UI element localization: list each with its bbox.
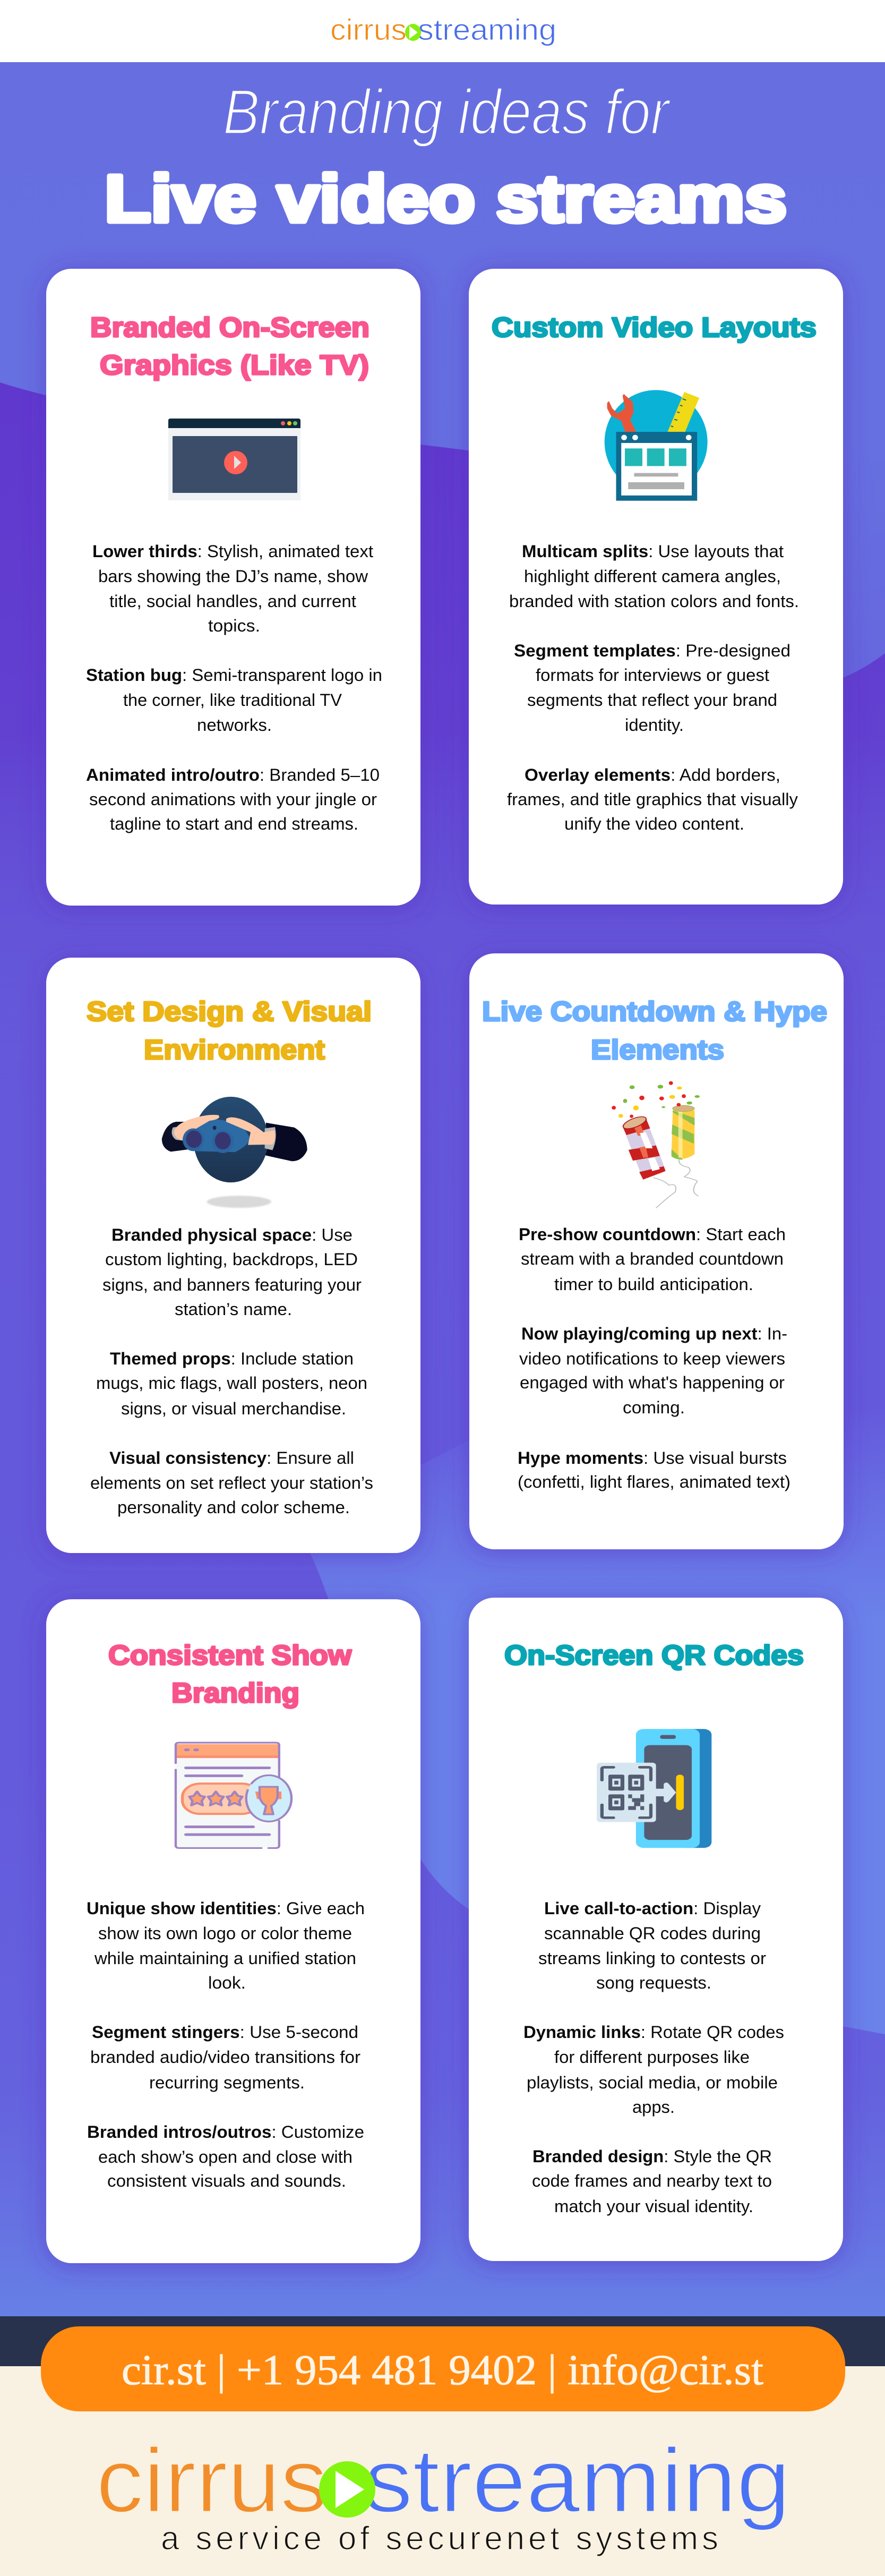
top logo bar: cirrus: [330, 13, 407, 46]
icon: layout window with tools: [605, 390, 708, 501]
text: video layout ideas: branded with station colors and fonts.: [509, 592, 799, 611]
text: countdown and hype ideas: [518, 1225, 791, 1491]
heading: branded on-screen graphics: [90, 312, 370, 381]
text: video layout ideas: highlight different camera angles,: [524, 567, 781, 586]
panel: live countdown and hype elements: [469, 953, 844, 1549]
panel: on-screen qr codes: [469, 1598, 843, 2261]
heading: set design and visual environment: [87, 996, 372, 1065]
text: countdown and hype ideas: Hype moments: Use visual bursts: [518, 1448, 787, 1468]
text: show branding ideas: each show’s open and close with: [98, 2147, 353, 2166]
text: countdown and hype ideas: stream with a branded countdown: [521, 1249, 784, 1268]
text: show branding ideas: Unique show identities: Give each: [87, 1899, 365, 1918]
text: video layout ideas: Overlay elements: Add borders,: [525, 765, 780, 784]
text: on-screen graphics ideas: the corner, like traditional TV: [123, 690, 342, 710]
text: video layout ideas: [507, 542, 799, 833]
text: qr code ideas: [523, 1899, 784, 2216]
text: set design ideas: Visual consistency: Ensure all: [109, 1448, 354, 1468]
text: show branding ideas: while maintaining a unified station: [94, 1949, 356, 1968]
text: video layout ideas: formats for interviews or guest: [536, 666, 769, 685]
heading: consistent show branding: Consistent Show: [108, 1640, 352, 1671]
text: on-screen graphics ideas: Station bug: Semi-transparent logo in: [86, 666, 382, 685]
text: show branding ideas: show its own logo or color theme: [98, 1924, 352, 1943]
text: show branding ideas: consistent visuals and sounds.: [107, 2171, 346, 2190]
text: on-screen graphics ideas: tagline to start and end streams.: [110, 814, 358, 833]
text: show branding ideas: Branded intros/outros: Customize: [87, 2122, 364, 2142]
panel: custom video layouts: [469, 269, 843, 905]
text: set design ideas: signs, or visual merchandise.: [121, 1399, 346, 1418]
text: set design ideas: mugs, mic flags, wall posters, neon: [96, 1374, 367, 1393]
text: video layout ideas: frames, and title graphics that visually: [507, 790, 798, 809]
text: qr code ideas: apps.: [632, 2097, 675, 2117]
text: countdown and hype ideas: Pre-show countdown: Start each: [519, 1225, 786, 1244]
title: [105, 76, 787, 236]
text: set design ideas: station’s name.: [175, 1300, 292, 1319]
title: Branding ideas for: [223, 76, 671, 148]
icon: party poppers: [612, 1081, 700, 1208]
text: on-screen graphics ideas: bars showing the DJ’s name, show: [98, 567, 368, 586]
heading: live countdown and hype elements: [482, 996, 827, 1065]
text: countdown and hype ideas: (confetti, light flares, animated text): [518, 1472, 791, 1491]
contact pill: cir.st | +1 954 481 9402 | info@cir.st: [122, 2347, 763, 2394]
heading: custom video layouts: Custom Video Layouts: [492, 312, 817, 343]
contact pill: [41, 2326, 845, 2411]
text: qr code ideas: for different purposes like: [554, 2048, 750, 2067]
text: qr code ideas: song requests.: [596, 1973, 711, 1992]
text: show branding ideas: look.: [208, 1973, 246, 1992]
text: on-screen graphics ideas: networks.: [197, 715, 272, 735]
text: countdown and hype ideas: Now playing/coming up next: In-: [521, 1324, 787, 1343]
title: Live video streams: [105, 162, 787, 236]
text: qr code ideas: Branded design: Style the QR: [532, 2147, 772, 2166]
text: qr code ideas: streams linking to contests or: [538, 1949, 766, 1968]
text: on-screen graphics ideas: second animations with your jingle or: [89, 790, 377, 809]
text: on-screen graphics ideas: [86, 542, 382, 833]
text: qr code ideas: Live call-to-action: Display: [544, 1899, 761, 1918]
text: show branding ideas: branded audio/video transitions for: [90, 2048, 360, 2067]
heading: on-screen qr codes: On-Screen QR Codes: [504, 1640, 804, 1671]
heading: set design and visual environment: Set Design & Visual: [87, 996, 372, 1027]
text: set design ideas: personality and color scheme.: [117, 1498, 350, 1517]
text: countdown and hype ideas: engaged with what's happening or: [520, 1373, 785, 1392]
text: video layout ideas: segments that reflect your brand: [527, 690, 777, 710]
panel: branded on-screen graphics: [46, 269, 420, 906]
text: on-screen graphics ideas: Animated intro/outro: Branded 5–10: [86, 765, 380, 784]
text: video layout ideas: Multicam splits: Use layouts that: [522, 542, 784, 561]
heading: consistent show branding: [108, 1640, 352, 1709]
icon: figure with binoculars: [162, 1097, 307, 1208]
footer logo: streaming: [364, 2430, 791, 2531]
text: show branding ideas: recurring segments.: [149, 2073, 305, 2092]
text: video layout ideas: unify the video content.: [564, 814, 744, 833]
text: qr code ideas: code frames and nearby text to: [532, 2171, 772, 2190]
text: set design ideas: Branded physical space: Use: [111, 1225, 353, 1244]
text: countdown and hype ideas: timer to build anticipation.: [554, 1275, 753, 1294]
text: qr code ideas: scannable QR codes during: [544, 1924, 761, 1943]
text: show branding ideas: Segment stingers: Use 5-second: [92, 2023, 358, 2042]
heading: live countdown and hype elements: Live Countdown & Hype: [482, 996, 827, 1027]
text: countdown and hype ideas: coming.: [623, 1398, 685, 1417]
text: on-screen graphics ideas: title, social handles, and current: [109, 592, 356, 611]
panel: consistent show branding: [46, 1599, 420, 2263]
icon: phone scanning qr code: [597, 1729, 711, 1848]
text: set design ideas: Themed props: Include station: [110, 1349, 354, 1368]
heading: branded on-screen graphics: Graphics (Like TV): [100, 350, 369, 381]
text: qr code ideas: playlists, social media, or mobile: [527, 2073, 778, 2092]
heading: live countdown and hype elements: Elements: [591, 1035, 724, 1065]
text: show branding ideas: [87, 1899, 365, 2190]
text: on-screen graphics ideas: Lower thirds: Stylish, animated text: [92, 542, 373, 561]
panel: set design and visual environment: [46, 958, 420, 1553]
text: countdown and hype ideas: video notifications to keep viewers: [519, 1349, 785, 1368]
top logo bar: streaming: [418, 13, 556, 46]
heading: set design and visual environment: Environment: [144, 1035, 325, 1065]
text: set design ideas: custom lighting, backdrops, LED: [105, 1250, 358, 1269]
text: set design ideas: elements on set reflect your station’s: [90, 1473, 373, 1492]
text: set design ideas: [90, 1225, 373, 1517]
text: qr code ideas: match your visual identity.: [554, 2197, 753, 2216]
footer background: [0, 2316, 885, 2576]
tagline: a service of securenet systems: [161, 2520, 718, 2557]
top logo bar: [0, 0, 885, 62]
icon: video player window: [168, 419, 300, 500]
footer logo: cirrus: [96, 2430, 328, 2531]
footer logo: [96, 2430, 791, 2531]
text: video layout ideas: Segment templates: Pre-designed: [514, 641, 791, 660]
text: video layout ideas: identity.: [625, 715, 684, 735]
heading: branded on-screen graphics: Branded On-Screen: [90, 312, 370, 343]
icon: rating page with trophy: [176, 1743, 291, 1848]
text: qr code ideas: Dynamic links: Rotate QR codes: [523, 2023, 784, 2042]
text: on-screen graphics ideas: topics.: [208, 616, 260, 635]
heading: consistent show branding: Branding: [171, 1678, 299, 1709]
text: set design ideas: signs, and banners featuring your: [102, 1275, 362, 1294]
